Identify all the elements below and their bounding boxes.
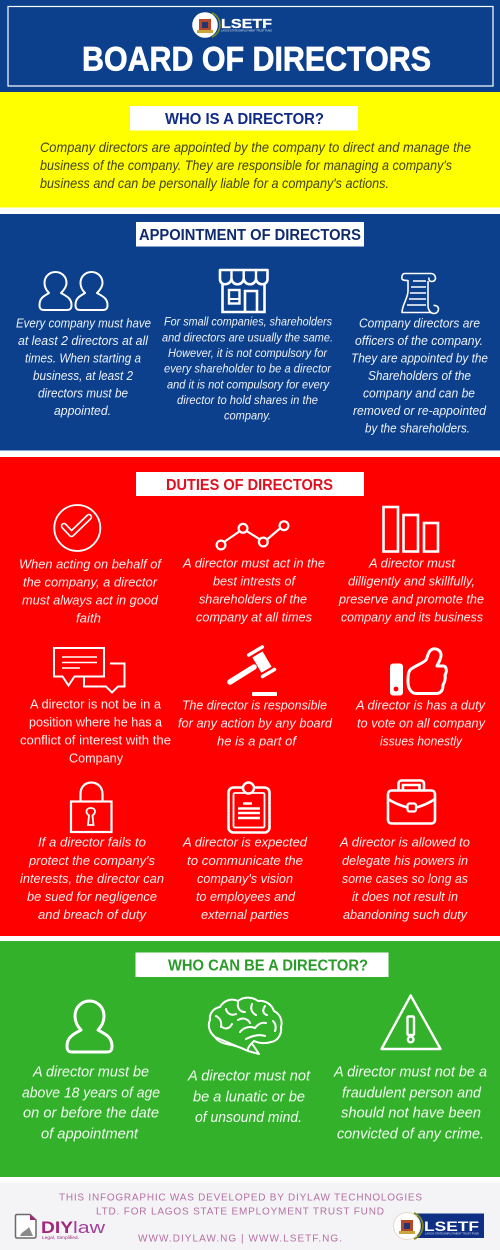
text block: good faith: faith [76, 611, 101, 626]
icon: padlock [71, 782, 112, 832]
text block: sound mind: of unsound mind. [195, 1109, 302, 1126]
text block: delegation: some cases so long as [342, 871, 468, 886]
text block: definition: business and can be personally liable for a company's actions. [40, 175, 389, 191]
icon: clipboard [228, 782, 270, 832]
text block: officers: officers of the company. [355, 333, 483, 348]
text block: diligence: A director must [368, 555, 456, 570]
text block: best interests: A director must act in the [182, 555, 325, 570]
text block: board responsibility: he is a part of [217, 733, 297, 748]
text block: delegation: abandoning such duty [343, 907, 468, 922]
text block: definition [40, 139, 471, 191]
text block: diligence [338, 555, 484, 625]
text block: sound mind: be a lunatic or be [193, 1088, 305, 1105]
heading: duties of directors: DUTIES OF DIRECTORS [166, 477, 333, 494]
text block: officers [351, 316, 488, 436]
text block: good faith: the company, a director [23, 575, 158, 590]
text block: sound mind [187, 1068, 311, 1126]
text block: shareholders: and directors are usually the same. [162, 330, 333, 344]
logo: LSETF: LSETF [221, 17, 272, 31]
text block: conflict of interest: position where he has a [29, 715, 163, 730]
text block: board responsibility: for any action by any board [178, 715, 333, 730]
panel: appointment of directors [0, 214, 500, 450]
text block: credits: WWW.DIYLAW.NG | WWW.LSETF.NG. [138, 1234, 342, 1245]
text block: definition: business of the company. They are responsible for managing a company's [40, 157, 452, 173]
text block: good faith: When acting on behalf of [19, 556, 162, 571]
text block: age requirement: on or before the date [23, 1105, 159, 1122]
logo: DIYlaw [16, 1214, 106, 1240]
icon: person [67, 1001, 112, 1052]
logo: LSETF [192, 12, 272, 38]
text block: negligence [20, 835, 164, 922]
heading: who can be a director [136, 952, 388, 977]
logo: DIYlaw: DIY [41, 1218, 74, 1237]
text block: shareholders: every shareholder to be a director [164, 362, 332, 376]
text block: communication: external parties [201, 907, 289, 922]
text block: minimum directors: directors must be [38, 386, 128, 401]
text block: communication: to employees and [196, 889, 296, 904]
text block: credits [59, 1193, 422, 1245]
text block: voting: A director is has a duty [355, 697, 486, 712]
text block: no fraud: A director must not be a [333, 1064, 487, 1081]
icon: brain [209, 998, 282, 1054]
text block: no fraud: convicted of any crime. [337, 1125, 484, 1142]
text block: communication: A director is expected [182, 835, 308, 850]
text block: best interests: company at all times [196, 610, 312, 625]
icon: shop [220, 270, 268, 312]
text block: voting [355, 697, 486, 748]
logo: LSETF footer: LSETF [424, 1219, 479, 1234]
text block: delegation: A director is allowed to [339, 835, 470, 850]
text block: shareholders: For small companies, shareholders [164, 315, 332, 329]
text block: minimum directors: Every company must have [16, 316, 151, 330]
icon: bar chart [384, 507, 438, 552]
text block: delegation: it does not result in [352, 889, 458, 904]
text block: no fraud: should not have been [341, 1105, 481, 1122]
text block: minimum directors: times. When starting a [25, 351, 141, 366]
text block: negligence: interests, the director can [20, 871, 164, 886]
icon: warning triangle [382, 996, 440, 1049]
text block: voting: to vote on all company [357, 715, 486, 730]
panel: footer [0, 1183, 500, 1250]
text block: shareholders: and it is not compulsory for every [167, 377, 330, 391]
text block: negligence: protect the company's [28, 853, 155, 868]
text block: shareholders: However, it is not compulsory for [168, 346, 328, 360]
text block: credits: LTD. FOR LAGOS STATE EMPLOYMENT TRUST FUND [96, 1207, 384, 1218]
title: BOARD OF DIRECTORS [82, 40, 431, 78]
text block: negligence: be sued for negligence [27, 889, 157, 904]
text block: communication [182, 835, 308, 922]
text block: communication: company's vision [197, 871, 293, 886]
logo: LSETF footer [394, 1212, 484, 1240]
text block: conflict of interest [20, 696, 171, 766]
icon: thumbs up [390, 649, 446, 696]
text block: shareholders: company. [224, 409, 271, 423]
text block: shareholders: director to hold shares in the [177, 393, 318, 407]
text block: minimum directors: at least 2 directors at all [18, 333, 149, 348]
text block: diligence: preserve and promote the [338, 592, 484, 607]
text block: negligence: If a director fails to [38, 835, 146, 850]
logo: DIYlaw: Legal, Simplified. [42, 1235, 79, 1240]
text block: definition: Company directors are appointed by the company to direct and manage the [40, 139, 471, 155]
panel: who is a director [0, 92, 500, 208]
text block: board responsibility: The director is responsible [182, 697, 327, 712]
text block: officers: Company directors are [359, 316, 480, 330]
text block: officers: company and can be [363, 386, 475, 401]
text block: board responsibility [178, 697, 333, 748]
icon: two people [40, 272, 108, 310]
icon: scroll [402, 274, 438, 314]
text block: best interests: best intrests of [213, 574, 296, 589]
text block: conflict of interest: A director is not be in a [30, 696, 162, 711]
text block: conflict of interest: conflict of interest with the [20, 732, 171, 747]
text block: minimum directors [16, 316, 151, 418]
text block: officers: removed or re-appointed [353, 403, 487, 418]
text block: no fraud: fraudulent person and [342, 1084, 482, 1101]
logo: LSETF: LAGOS STATE EMPLOYMENT TRUST FUND [221, 30, 272, 32]
text block: good faith [19, 556, 162, 626]
heading: appointment of directors: APPOINTMENT OF DIRECTORS [139, 227, 361, 244]
heading: who is a director: WHO IS A DIRECTOR? [165, 111, 324, 128]
text block: officers: They are appointed by the [351, 351, 488, 366]
icon: gavel [230, 647, 277, 696]
panel: header [0, 0, 500, 92]
panel: duties of directors [0, 457, 500, 936]
icon: line chart [217, 521, 288, 549]
text block: diligence: company and its business [341, 610, 483, 625]
heading: duties of directors [136, 472, 364, 496]
text block: voting: issues honestly [380, 733, 463, 748]
text block: negligence: and breach of duty [38, 907, 147, 922]
text block: communication: to communicate the [187, 853, 303, 868]
text block: sound mind: A director must not [187, 1068, 311, 1085]
text block: good faith: must always act in good [22, 592, 159, 607]
heading: appointment of directors [136, 222, 364, 246]
text block: minimum directors: business, at least 2 [33, 368, 134, 383]
heading: who can be a director: WHO CAN BE A DIRECTOR? [168, 958, 368, 975]
icon: briefcase [388, 780, 435, 824]
text block: delegation: delegate his powers in [342, 853, 468, 868]
text block: conflict of interest: Company [69, 751, 123, 766]
text block: diligence: dilligently and skillfully, [348, 574, 475, 589]
text block: no fraud [333, 1064, 487, 1142]
text block: shareholders [162, 315, 333, 423]
text block: officers: by the shareholders. [365, 421, 470, 436]
panel: who can be a director [0, 941, 500, 1177]
logo: LSETF footer: LAGOS STATE EMPLOYMENT TRUST FUND [425, 1232, 479, 1236]
text block: minimum directors: appointed. [54, 403, 111, 418]
text block: age requirement: of appointment [41, 1125, 139, 1142]
text block: age requirement [22, 1064, 160, 1142]
text block: age requirement: above 18 years of age [22, 1084, 160, 1101]
icon: speech bubbles [54, 648, 124, 692]
text block: credits: THIS INFOGRAPHIC WAS DEVELOPED BY DIYLAW TECHNOLOGIES [59, 1193, 422, 1204]
heading: who is a director [130, 106, 358, 130]
logo: DIYlaw: law [73, 1218, 106, 1237]
text block: best interests [182, 555, 325, 625]
text block: age requirement: A director must be [32, 1064, 149, 1081]
text block: delegation [339, 835, 470, 922]
icon: check mark in circle [54, 505, 100, 551]
text block: officers: Shareholders of the [368, 368, 471, 383]
text block: best interests: shareholders of the [199, 592, 307, 607]
